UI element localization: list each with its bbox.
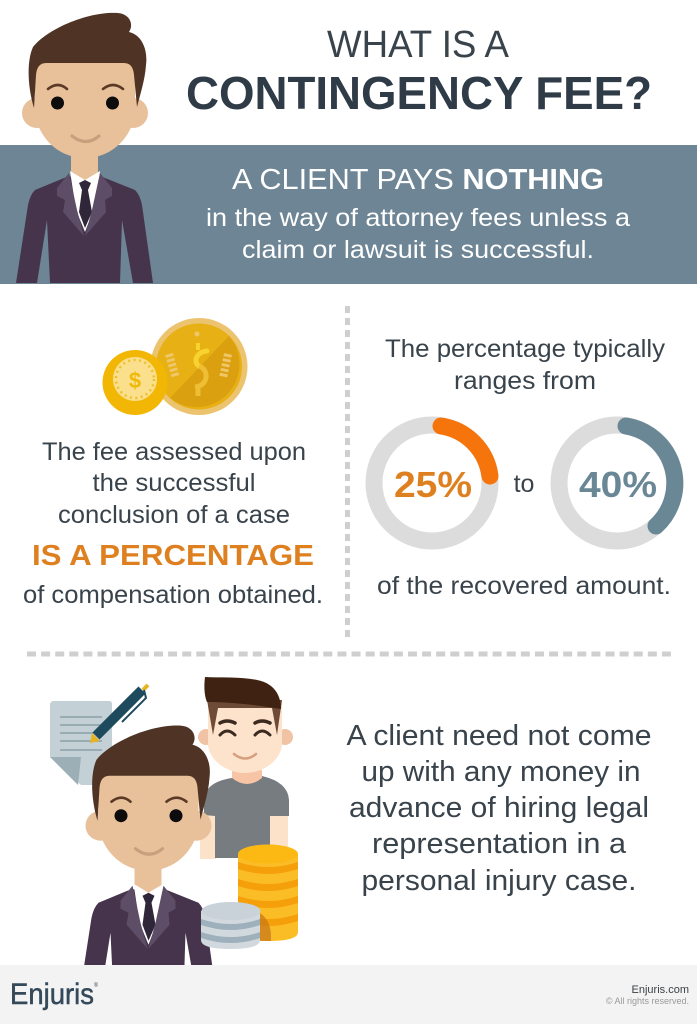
bottom text block: advance of hiring legal (349, 792, 649, 824)
donut: 40% (559, 425, 675, 541)
vertical divider (345, 306, 350, 640)
right heading: ranges from (454, 367, 596, 395)
footer credit: © All rights reserved. (606, 996, 689, 1006)
icon: document (50, 701, 112, 785)
illustration: lawyer, top (16, 13, 153, 283)
bottom text block: representation in a (372, 828, 627, 860)
bottom text block: personal injury case. (362, 865, 636, 897)
icon: gold coin stack (238, 844, 298, 941)
banner text: in the way of attorney fees unless a (206, 204, 630, 232)
left text block: conclusion of a case (58, 501, 290, 529)
left text block: The fee assessed upon (42, 438, 306, 466)
right heading: The percentage typically (385, 335, 666, 363)
title: CONTINGENCY FEE? (186, 67, 652, 119)
icon: silver coin stack (201, 902, 260, 949)
icon: gold coins: $ (129, 368, 141, 393)
bottom text block (346, 720, 652, 897)
horizontal divider (27, 652, 671, 656)
banner band (0, 145, 697, 284)
title (186, 24, 652, 119)
donut: 25%: 25% (394, 464, 472, 505)
footer (0, 965, 697, 1024)
logo: ® (94, 982, 99, 989)
right heading (385, 335, 666, 395)
left text block: the successful (92, 469, 256, 497)
left text block: IS A PERCENTAGE (32, 540, 314, 572)
illustration: client, document, coins and lawyer (50, 677, 298, 996)
banner text: A CLIENT PAYS NOTHING (232, 164, 604, 196)
bottom text block: up with any money in (362, 756, 640, 788)
client figure (198, 677, 293, 859)
banner text: claim or lawsuit is successful. (242, 236, 594, 264)
left text block (23, 438, 323, 609)
right caption: of the recovered amount. (377, 572, 671, 600)
icon: gold coins (102, 318, 248, 415)
title: WHAT IS A (327, 24, 510, 66)
label: to: to (514, 470, 534, 498)
footer credit: Enjuris.com (632, 984, 689, 996)
logo: Enjuris (10, 978, 102, 1011)
lawyer figure (84, 726, 212, 965)
bottom text block: A client need not come (346, 720, 652, 752)
icon: pen (90, 685, 148, 743)
banner text (206, 164, 630, 264)
donut: 25% (374, 425, 490, 541)
donut: 40%: 40% (579, 464, 657, 505)
footer credit (606, 984, 689, 1006)
left text block: of compensation obtained. (23, 581, 323, 609)
